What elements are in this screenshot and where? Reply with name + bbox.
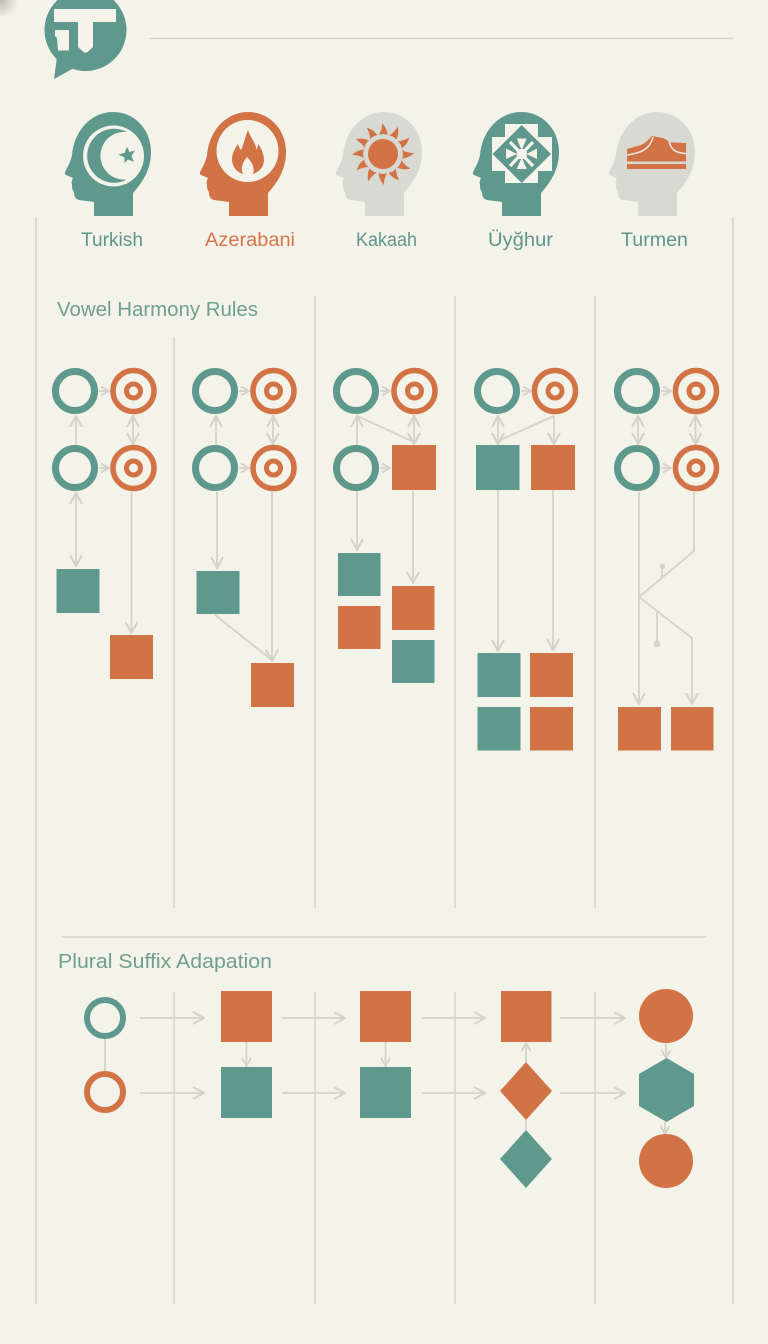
icon: Uyghur head with geometric ornament xyxy=(473,112,559,216)
label: Kakaah: Kakaah xyxy=(356,230,417,251)
panel: vowel column 5 xyxy=(618,370,716,750)
icon: Azerbaijani head with flame xyxy=(200,112,286,216)
panel: vowel column 4 xyxy=(476,370,576,750)
panel: vowel column 3 xyxy=(336,370,436,683)
panel: vowel column 2 xyxy=(196,370,294,707)
connector arrows xyxy=(105,1018,666,1134)
heading: Plural Suffix Adapation: Plural Suffix Adapation xyxy=(58,951,272,973)
flow: plural suffix adaptation xyxy=(87,989,694,1188)
label: Uyghur: Üyğhur xyxy=(488,230,554,251)
label: Turmen: Turmen xyxy=(621,230,688,251)
icon: Turkmen head with shoe motif xyxy=(609,112,695,216)
panel: vowel column 1 xyxy=(56,370,154,679)
logo: speech bubble with T xyxy=(44,0,126,79)
icon: Turkish head with crescent and star xyxy=(65,112,151,216)
heading: Vowel Harmony Rules: Vowel Harmony Rules xyxy=(57,299,258,321)
label: Azerabani: Azerabani xyxy=(205,230,295,251)
icon: Kazakh head with sun xyxy=(336,112,422,216)
label: Turkish: Turkish xyxy=(81,230,143,251)
